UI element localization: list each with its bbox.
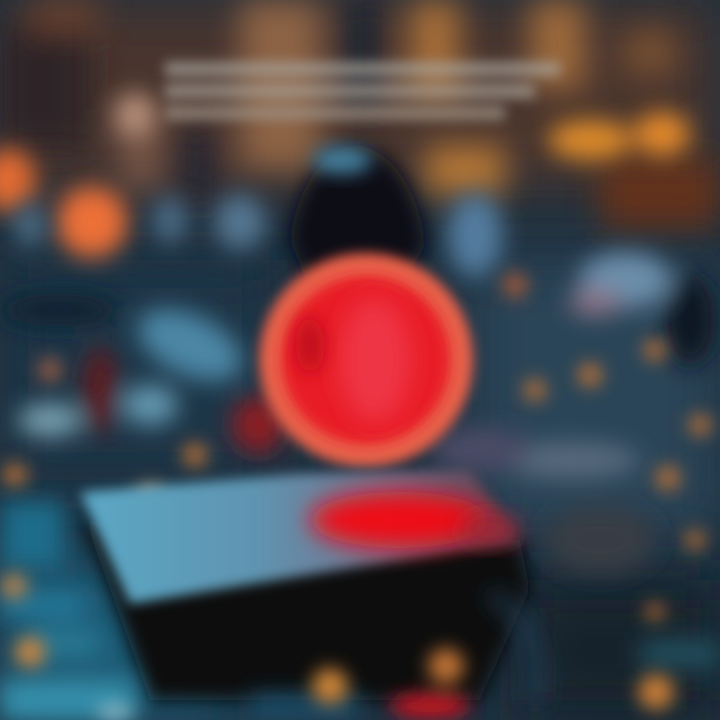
orange glow blobs [0, 93, 690, 258]
crowd highlights [0, 193, 716, 574]
black table base [85, 520, 530, 700]
table top [80, 470, 520, 604]
blurred title band [165, 62, 560, 120]
outer ring [259, 253, 473, 467]
inner red disc [282, 276, 450, 444]
table [80, 470, 530, 700]
top warm streaks [0, 0, 720, 230]
bottom teal panels [0, 500, 720, 720]
bottom bokeh [1, 573, 674, 719]
dark hooded figure [290, 145, 425, 290]
red reflection [310, 492, 490, 548]
red circle [259, 253, 473, 467]
small orange bokeh [3, 273, 711, 621]
